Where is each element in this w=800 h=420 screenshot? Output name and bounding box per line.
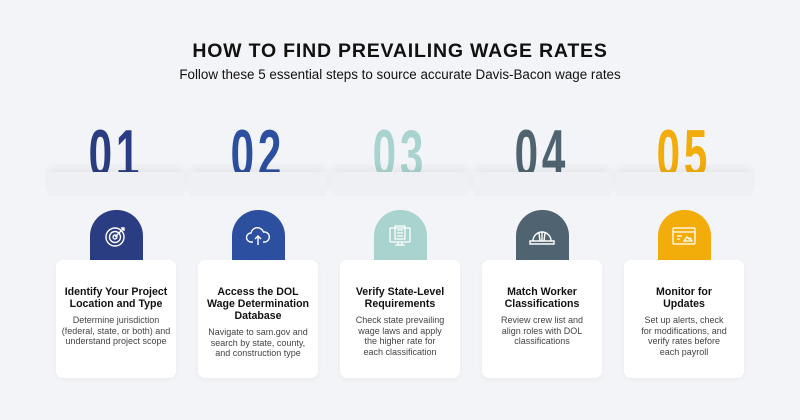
card: step 1 text: Determine jurisdiction [73, 315, 159, 325]
card: step 5 text: for modifications, and [641, 326, 727, 336]
card: step 4 text [482, 260, 602, 378]
panel: step 2 [193, 120, 323, 378]
card: step 1 text: (federal, state, or both) and [62, 326, 170, 336]
card: step 5 text: Set up alerts, check [644, 315, 724, 325]
icon: monitor document [374, 210, 427, 260]
card: step 4 text: Classifications [505, 298, 579, 310]
icon: browser window [658, 210, 711, 260]
card: step 2 text: Database [234, 310, 282, 322]
card: step 3 text: the higher rate for [364, 336, 436, 346]
panel: step 4 [477, 120, 607, 378]
card: step 1 text: Location and Type [70, 298, 162, 310]
card: step 3 text: Requirements [365, 298, 435, 310]
card: step 5 text [624, 260, 744, 378]
card: step 2 text: Navigate to sam.gov and [208, 327, 308, 337]
card: step 3 text: each classification [363, 347, 437, 357]
card: step 5 text: verify rates before [648, 336, 720, 346]
card: step 4 text: align roles with DOL [502, 326, 582, 336]
card: step 5 text: each payroll [660, 347, 708, 357]
card: step 1 text [56, 260, 176, 378]
card: step 4 text: Review crew list and [501, 315, 583, 325]
icon: cloud upload [232, 210, 285, 260]
card: step 5 text: Updates [663, 298, 705, 310]
card: step 3 text: wage laws and apply [358, 326, 442, 336]
title: HOW TO FIND PREVAILING WAGE RATES [192, 40, 608, 62]
card: step 1 text: Identify Your Project [65, 286, 167, 298]
panel: step 5 [619, 120, 749, 378]
icon: hard hat [516, 210, 569, 260]
card: step 2 text: search by state, county, [211, 338, 305, 348]
card: step 2 text: Wage Determination [207, 298, 309, 310]
subtitle: Follow these 5 essential steps to source accurate Davis-Bacon wage rates [179, 67, 621, 82]
card: step 5 text: Monitor for [656, 286, 712, 298]
icon: target [90, 210, 143, 260]
card: step 4 text: Match Worker [507, 286, 577, 298]
card: step 3 text: Check state prevailing [356, 315, 444, 325]
card: step 2 text [198, 260, 318, 378]
card: step 2 text: and construction type [215, 348, 301, 358]
panel: step 3 [335, 120, 465, 378]
card: step 2 text: Access the DOL [217, 286, 299, 298]
card: step 1 text: understand project scope [65, 336, 167, 346]
card: step 4 text: classifications [514, 336, 570, 346]
panel: step 1 [51, 120, 181, 378]
card: step 3 text [340, 260, 460, 378]
card: step 3 text: Verify State-Level [356, 286, 444, 298]
